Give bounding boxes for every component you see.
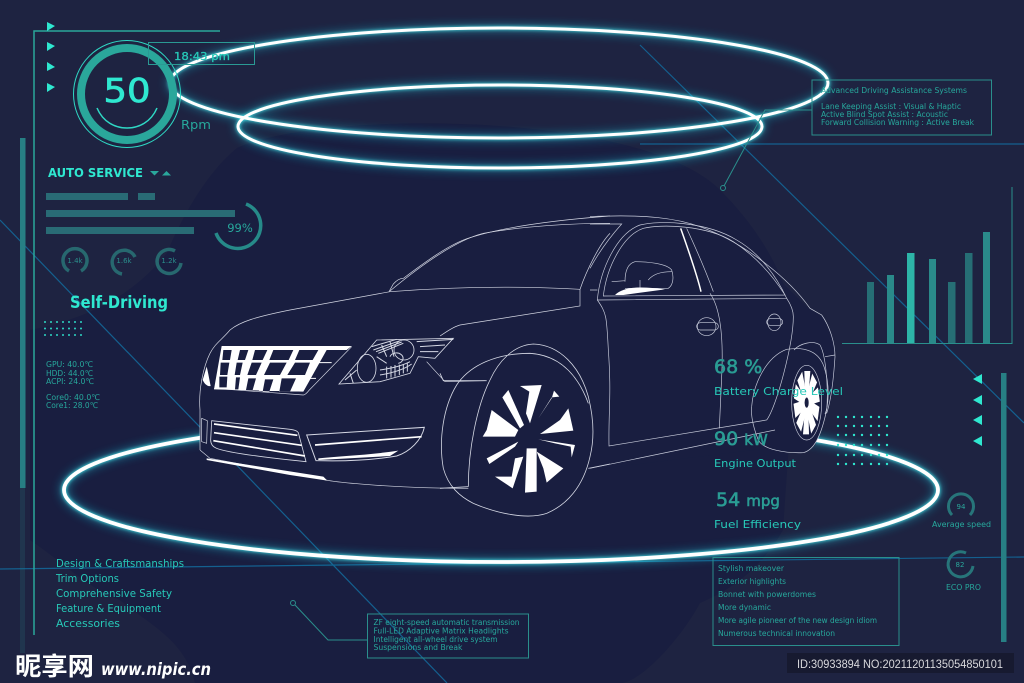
stat: fuel: 54 mpg (716, 489, 780, 511)
stat: fuel: Fuel Efficiency (714, 518, 802, 531)
headlight (339, 338, 453, 384)
small gauges: 1.6k (116, 257, 133, 265)
dot matrix right (837, 416, 888, 465)
service progress bars (46, 193, 235, 234)
mirror (612, 262, 673, 295)
glowing floor ellipse (64, 418, 938, 562)
rpm gauge: Rpm (181, 118, 211, 132)
gauge: eco pro (946, 552, 981, 592)
callout: drivetrain: Suspensions and Break (374, 643, 463, 652)
door handles (697, 314, 783, 336)
arrow markers left (47, 22, 55, 92)
callout: exterior: More dynamic (718, 603, 771, 612)
stat: battery: 68 % (714, 356, 762, 378)
callout: drivetrain: ZF eight-speed automatic transmission (374, 618, 520, 627)
gauge: average speed: 94 (957, 503, 966, 511)
callout: driving assistance: Active Blind Spot Assist : Acoustic (821, 110, 948, 119)
temperature readouts: Core0: 40.0℃ (46, 393, 100, 402)
dot matrix left (44, 321, 82, 336)
left bars and frame (20, 31, 220, 653)
small gauges: 1.2k (161, 257, 178, 265)
callout: driving assistance: Forward Collision Warning : Active Break (821, 118, 974, 127)
watermark (15, 647, 211, 683)
car illustration (200, 215, 835, 518)
watermark: www.nipic.cn (101, 660, 211, 680)
gauge: average speed (932, 494, 991, 529)
car front linework (200, 216, 610, 488)
menu list: Design & Craftsmanships (56, 558, 184, 570)
callout: drivetrain: Full-LED Adaptive Matrix Headlights (374, 626, 509, 636)
auto service heading: AUTO SERVICE (48, 165, 143, 180)
temperature readouts: ACPI: 24.0℃ (46, 377, 94, 386)
bumper intakes (202, 418, 424, 481)
callout: drivetrain (290, 600, 528, 658)
temperature readouts (46, 360, 100, 410)
grille (203, 346, 352, 392)
callout: driving assistance: Lane Keeping Assist : Visual & Haptic (821, 102, 961, 111)
gauge: eco pro: 82 (956, 561, 964, 569)
self-driving heading: Self-Driving (70, 293, 168, 312)
callout: exterior: Bonnet with powerdomes (718, 590, 816, 599)
id stamp: ID:30933894 NO:20211201135054850101 (797, 659, 1003, 671)
small gauges: 1.4k (67, 257, 84, 265)
stat: engine (714, 428, 797, 470)
callout: exterior (713, 558, 899, 646)
front wheel (440, 344, 610, 516)
right vertical bar (1001, 373, 1006, 642)
car silhouette (200, 215, 835, 518)
bar chart (842, 187, 1012, 344)
menu list: Trim Options (55, 573, 119, 585)
callout: exterior: Exterior highlights (718, 577, 786, 586)
glowing ellipses top (170, 28, 828, 168)
gauge: eco pro: ECO PRO (946, 583, 981, 592)
stat: fuel (714, 489, 802, 531)
time box: 18:43 pm (174, 50, 230, 63)
stat: battery (714, 356, 843, 398)
callout: exterior: Numerous technical innovation (718, 629, 835, 638)
menu list (55, 558, 184, 630)
gauge 99%: 99% (227, 221, 253, 235)
time box (148, 42, 254, 64)
temperature readouts: GPU: 40.0℃ (46, 360, 93, 369)
car rear linework (590, 216, 835, 468)
stat: engine: 90 kW (714, 428, 768, 450)
callout: driving assistance (720, 80, 992, 190)
stat: engine: Engine Output (714, 457, 797, 470)
callout: exterior: More agile pioneer of the new design idiom (718, 616, 877, 625)
temperature readouts: HDD: 44.0℃ (46, 369, 93, 378)
menu list: Feature & Equipment (56, 603, 161, 615)
small gauges (63, 249, 181, 274)
gauge 99% (216, 204, 261, 248)
id stamp (787, 653, 1014, 673)
gauge: average speed: Average speed (932, 520, 991, 529)
rpm gauge (74, 40, 211, 148)
stat: battery: Battery Charge Level (714, 385, 843, 398)
rear wheel (792, 365, 822, 440)
rpm gauge: 50 (104, 71, 150, 110)
arrow markers right (973, 374, 982, 446)
callout: drivetrain: Intelligent all-wheel drive system (374, 635, 498, 644)
watermark: 昵享网 (15, 647, 94, 683)
callout: driving assistance: Advanced Driving Assistance Systems (821, 86, 967, 95)
temperature readouts: Core1: 28.0℃ (46, 401, 98, 410)
callout: exterior: Stylish makeover (718, 564, 785, 573)
menu list: Comprehensive Safety (56, 588, 172, 600)
menu list: Accessories (56, 618, 120, 630)
